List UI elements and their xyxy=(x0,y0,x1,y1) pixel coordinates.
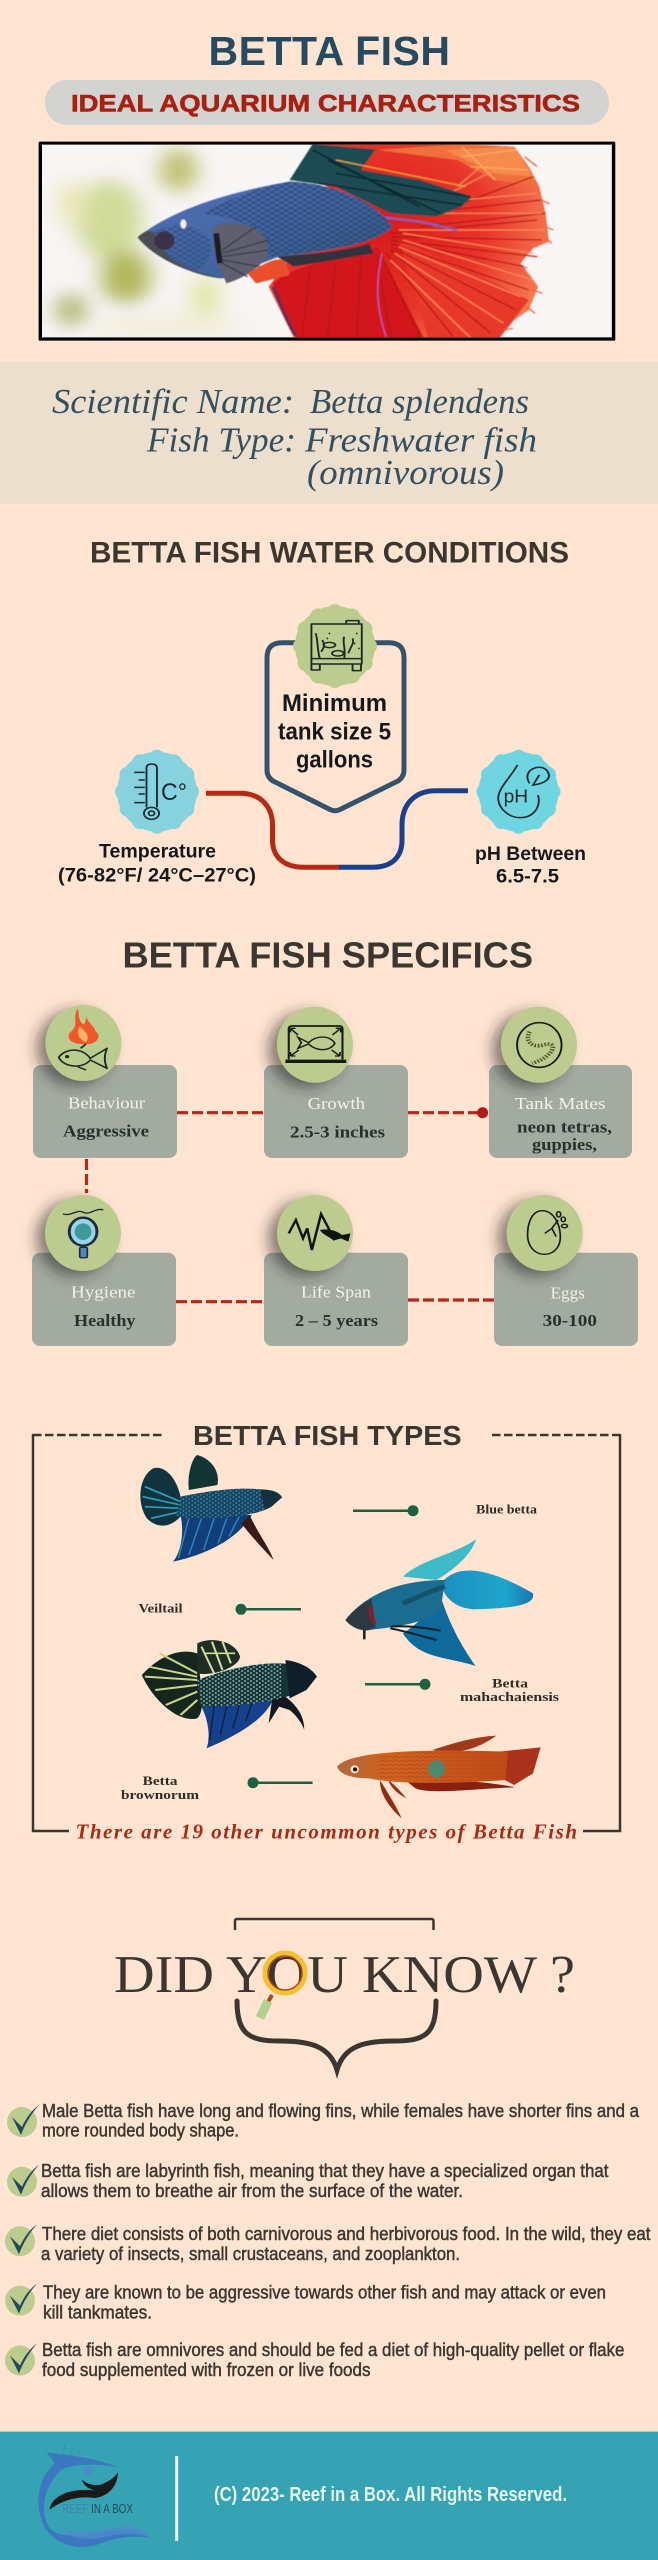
icon: magnifying glass xyxy=(260,1953,305,2018)
fact 4 xyxy=(5,2282,606,2322)
label: betta brownorum xyxy=(121,1773,313,1802)
icon: school of fish xyxy=(501,1007,577,1083)
subtitle pill xyxy=(45,80,609,125)
label: betta mahachaiensis: mahachaiensis xyxy=(460,1689,559,1704)
logo: Reef in a Box xyxy=(38,2444,152,2547)
specifics card: hygiene xyxy=(32,1195,176,1346)
label: veiltail: Veiltail xyxy=(138,1601,183,1616)
fact 5: Betta fish are omnivores and should be fed a diet of high-quality pellet or flake xyxy=(42,2340,624,2360)
title: BETTA FISH xyxy=(208,28,450,74)
specifics card: life span: 2 – 5 years xyxy=(295,1311,379,1330)
dorsal fin xyxy=(290,144,472,217)
fact 5 xyxy=(5,2340,624,2380)
specifics card: behaviour xyxy=(33,1005,177,1158)
tank size callout xyxy=(267,606,404,811)
footer xyxy=(0,2432,658,2560)
icon: fish on screen xyxy=(277,1007,353,1083)
temperature block xyxy=(58,752,256,887)
fact 1 xyxy=(7,2101,640,2141)
shield outline xyxy=(267,643,404,811)
fact 5: food supplemented with frozen or live foods xyxy=(42,2360,370,2380)
connector pipe xyxy=(206,791,468,867)
specifics card: hygiene: Healthy xyxy=(74,1311,136,1330)
icon: pH drop: pH xyxy=(504,787,528,807)
pH block: 6.5-7.5 xyxy=(496,867,559,888)
did you know header: DID YOU KNOW ? xyxy=(114,1946,575,2004)
specifics card: hygiene: Hygiene xyxy=(71,1283,136,1302)
label: betta brownorum: brownorum xyxy=(121,1787,199,1802)
species information band xyxy=(0,362,658,504)
tank size callout: Minimum xyxy=(282,690,387,717)
fact 1: more rounded body shape. xyxy=(42,2121,239,2141)
dashed connectors xyxy=(86,1107,494,1302)
fact 4: They are known to be aggressive towards other fish and may attack or even xyxy=(43,2282,606,2302)
fish: betta brownorum xyxy=(337,1736,541,1818)
specifics card: life span: Life Span xyxy=(301,1283,371,1302)
species information band: Freshwater fish xyxy=(304,421,537,460)
icon: magnifier xyxy=(45,1195,121,1271)
label: blue betta xyxy=(353,1501,538,1516)
panel: betta fish types xyxy=(33,1420,620,1843)
tank size callout: tank size 5 xyxy=(278,718,391,745)
top bracket xyxy=(235,1919,434,1930)
icon: aquarium xyxy=(295,606,375,686)
specifics card: eggs: Eggs xyxy=(550,1283,585,1302)
subtitle pill: IDEAL AQUARIUM CHARACTERISTICS xyxy=(71,90,580,118)
fact 3: a variety of insects, small crustaceans, and zooplankton. xyxy=(41,2244,460,2264)
curly brace xyxy=(237,2001,436,2070)
frame xyxy=(33,1434,620,1831)
tail fin xyxy=(269,144,549,338)
fact 2 xyxy=(7,2161,608,2201)
icon: fire and fish xyxy=(46,1005,122,1081)
panel: betta fish types: BETTA FISH TYPES xyxy=(193,1420,462,1451)
specifics card: eggs xyxy=(494,1195,638,1346)
tank size callout: gallons xyxy=(296,746,373,774)
specifics card: eggs: 30-100 xyxy=(543,1311,597,1330)
heading: specifics: BETTA FISH SPECIFICS xyxy=(122,934,533,975)
specifics card: growth: Growth xyxy=(308,1094,366,1113)
specifics card: behaviour: Aggressive xyxy=(63,1122,149,1141)
temperature block: Temperature xyxy=(99,841,216,862)
body xyxy=(138,182,392,278)
icon: thermometer: C° xyxy=(161,779,187,806)
fish: veiltail xyxy=(345,1539,533,1666)
species information band: Betta splendens xyxy=(310,382,529,421)
temperature block: (76-82°F/ 24°C–27°C) xyxy=(58,866,256,887)
icon: heartbeat fish xyxy=(277,1195,353,1271)
fact 4: kill tankmates. xyxy=(43,2302,152,2322)
icon: egg xyxy=(507,1195,583,1271)
fish: blue betta xyxy=(140,1455,282,1562)
did you know header xyxy=(114,1919,575,2070)
fish: betta mahachaiensis xyxy=(142,1640,317,1748)
specifics card: behaviour: Behaviour xyxy=(68,1093,146,1112)
fact list xyxy=(5,2101,650,2380)
label: betta mahachaiensis xyxy=(365,1675,559,1704)
label: blue betta: Blue betta xyxy=(476,1501,538,1516)
species information band: Scientific Name: xyxy=(52,382,294,421)
specifics card: tank mates: guppies, xyxy=(532,1135,597,1154)
fact 3 xyxy=(5,2224,650,2264)
specifics card: growth: 2.5-3 inches xyxy=(290,1122,386,1141)
hero photo: betta fish xyxy=(39,142,615,341)
specifics card: growth xyxy=(264,1007,408,1158)
species information band: Fish Type: xyxy=(146,421,296,460)
caption: uncommon types: There are 19 other uncommon types of Betta Fish xyxy=(76,1819,577,1843)
icon: thermometer xyxy=(117,752,197,832)
specifics card: life span xyxy=(264,1195,408,1346)
logo: Reef in a Box: REEF IN A BOX xyxy=(62,2502,134,2516)
specifics card: tank mates: neon tetras, xyxy=(517,1117,612,1136)
fact 2: allows them to breathe air from the surface of the water. xyxy=(41,2181,463,2201)
copyright: (C) 2023- Reef in a Box. All Rights Reserved. xyxy=(214,2484,567,2506)
gill and pectoral xyxy=(213,223,269,283)
label: veiltail xyxy=(138,1601,301,1616)
specifics card: tank mates xyxy=(489,1007,632,1158)
species information band: (omnivorous) xyxy=(307,453,504,492)
fact 2: Betta fish are labyrinth fish, meaning that they have a specialized organ that xyxy=(41,2161,608,2181)
specifics card: tank mates: Tank Mates xyxy=(515,1094,606,1113)
label: betta brownorum: Betta xyxy=(143,1773,178,1788)
heading: water conditions: BETTA FISH WATER CONDITIONS xyxy=(90,537,569,570)
pH block: pH Between xyxy=(475,844,586,865)
label: betta mahachaiensis: Betta xyxy=(492,1675,529,1690)
pH block xyxy=(475,752,586,888)
